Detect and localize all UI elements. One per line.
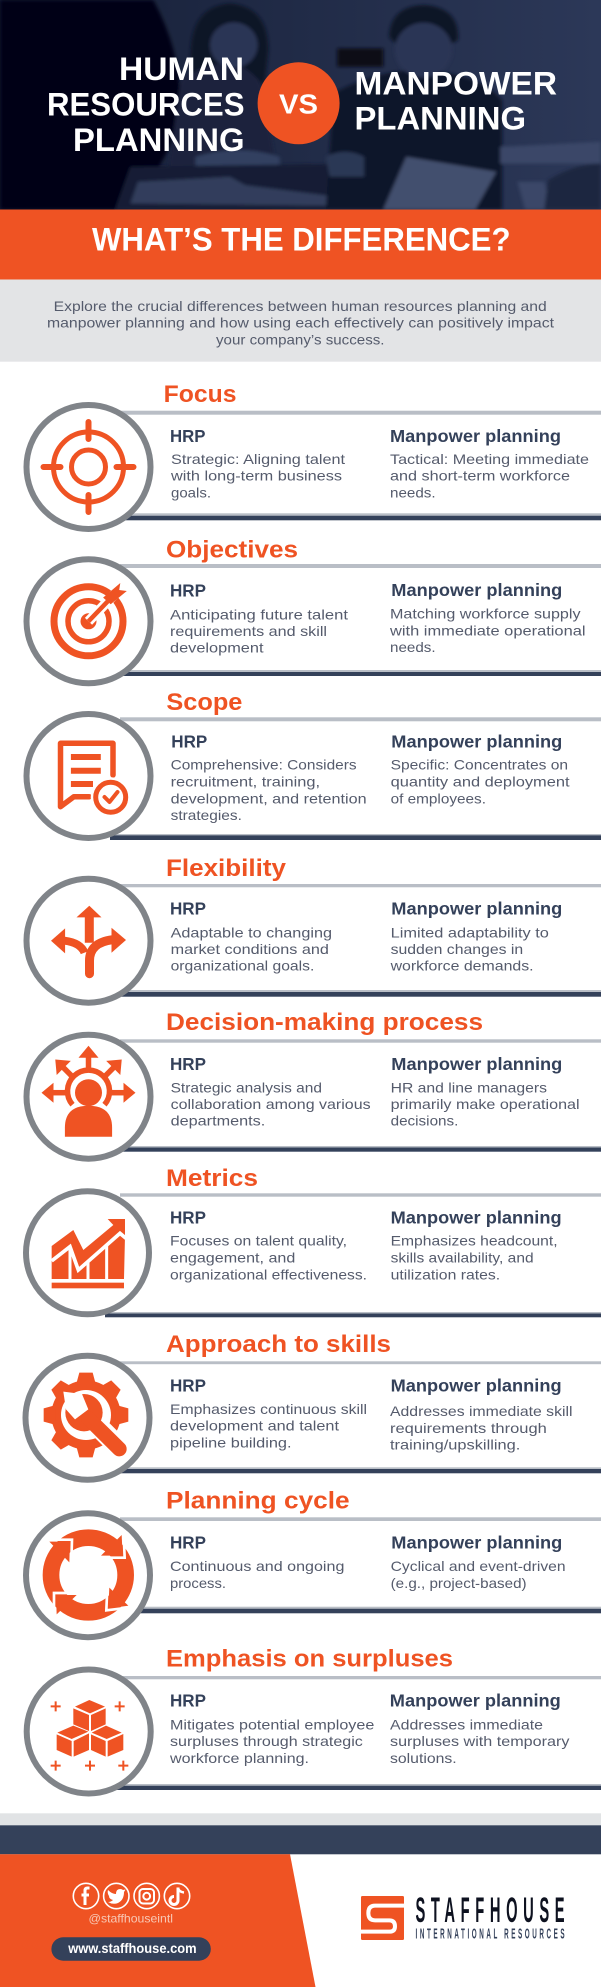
Manpower planning column: Manpower planning [390,1691,561,1711]
HRP column: surpluses through strategic [170,1733,363,1749]
HRP column: Continuous and ongoing [170,1558,344,1574]
HRP column: HRP [170,581,206,601]
Manpower planning column: Addresses immediate skill [390,1403,572,1419]
Manpower planning column: HR and line managers [391,1079,547,1095]
Manpower planning column: Cyclical and event-driven [391,1558,566,1574]
hero background photo [0,0,601,210]
heading: Scope [166,689,242,716]
Manpower planning column [390,1691,569,1766]
icon: target with arrow [26,559,150,683]
HRP column: Focuses on talent quality, [170,1233,347,1249]
Manpower planning column [391,732,570,806]
Manpower planning column: needs. [390,639,436,655]
panel: Approach to skills [26,1331,601,1480]
footer [0,1813,601,1987]
Manpower planning column: primarily make operational [391,1096,580,1112]
panel: Scope [26,689,601,840]
HRP column [170,898,332,974]
HRP column [170,1376,367,1451]
HRP column: workforce planning. [169,1750,309,1766]
Manpower planning column: Manpower planning [391,1054,562,1074]
Manpower planning column: and short-term workforce [390,468,570,484]
Manpower planning column: surpluses with temporary [390,1733,569,1749]
Manpower planning column [391,1532,566,1591]
right title: Manpower Planning: PLANNING [354,100,526,136]
icon: document with check badge [26,714,150,838]
icon: circular arrows [26,1513,150,1637]
website pill [51,1937,211,1961]
HRP column: development [170,640,264,656]
right title: Manpower Planning [354,65,557,136]
HRP column: requirements and skill [170,623,327,639]
intro text panel: Explore the crucial differences between human resources planning and [54,298,547,314]
Manpower planning column: with immediate operational [389,622,586,638]
Manpower planning column: workforce demands. [389,958,534,974]
Manpower planning column: quantity and deployment [391,773,570,789]
heading: Emphasis on surpluses [166,1646,453,1673]
Manpower planning column: decisions. [391,1113,458,1129]
heading: Flexibility [166,855,287,882]
panel: Focus [26,381,601,529]
HRP column: HRP [170,898,206,918]
HRP column: HRP [171,732,208,752]
icon: twitter [104,1883,129,1909]
Manpower planning column [389,898,562,974]
logo wordmark: STAFFHOUSE [416,1891,565,1930]
Manpower planning column [390,426,589,501]
panel: Emphasis on surpluses [27,1646,601,1794]
HRP column: HRP [170,1376,206,1396]
left title: Human Resources Planning [47,51,244,158]
Manpower planning column: Emphasizes headcount, [391,1233,558,1249]
icon: branching arrows [26,879,150,1003]
HRP column: organizational goals. [171,958,314,974]
left title: Human Resources Planning: HUMAN [119,51,244,87]
HRP column: HRP [170,1054,206,1074]
heading: Objectives [166,536,298,563]
heading: Metrics [166,1165,258,1192]
Manpower planning column: Matching workforce supply [390,606,580,622]
HRP column [170,1054,371,1129]
Manpower planning column: solutions. [390,1750,457,1766]
Manpower planning column: Manpower planning [391,732,562,752]
heading: Planning cycle [166,1488,350,1515]
Manpower planning column: Addresses immediate [390,1716,543,1732]
Manpower planning column [390,1376,572,1453]
Manpower planning column: utilization rates. [391,1266,500,1282]
HRP column [169,1691,375,1766]
HRP column: Anticipating future talent [170,606,348,622]
Manpower planning column: skills availability, and [391,1249,534,1265]
HRP column: with long-term business [170,468,342,484]
panel: Planning cycle [26,1488,601,1637]
icon: rising chart [26,1191,149,1314]
HRP column [170,1207,367,1282]
Manpower planning column: training/upskilling. [390,1437,520,1453]
Manpower planning column: of employees. [391,790,486,806]
heading: Decision-making process [166,1009,483,1036]
panel: Objectives [26,536,601,683]
icon: gear and wrench [26,1356,150,1480]
Manpower planning column [389,580,586,655]
icon: facebook [73,1883,99,1909]
Manpower planning column: Manpower planning [391,1376,562,1396]
logo: Staffhouse [361,1891,565,1942]
HRP column: Strategic: Aligning talent [171,451,345,467]
HRP column: recruitment, training, [171,773,320,789]
panel: Flexibility [26,855,601,1003]
icon: crosshair [26,405,150,529]
Manpower planning column: Specific: Concentrates on [391,757,568,773]
Manpower planning column: Manpower planning [391,898,562,918]
icon: tiktok [164,1883,190,1909]
subtitle band: WHAT’S THE DIFFERENCE? [92,222,510,258]
heading: Focus [164,381,236,408]
website pill: www.staffhouse.com [67,1941,197,1956]
HRP column: HRP [170,1532,206,1552]
HRP column: departments. [171,1113,265,1129]
Manpower planning column: Manpower planning [391,1532,562,1552]
intro text panel [0,280,601,362]
HRP column: Mitigates potential employee [170,1716,375,1732]
Manpower planning column: Manpower planning [390,426,561,446]
VS badge: VS [279,88,318,119]
Manpower planning column [391,1054,580,1129]
HRP column: Adaptable to changing [171,924,332,940]
Manpower planning column: sudden changes in [391,941,523,957]
HRP column [170,1532,344,1591]
hero banner [0,0,601,210]
Manpower planning column: Limited adaptability to [391,924,549,940]
logo mark [361,1896,404,1940]
left title: Human Resources Planning: RESOURCES [47,87,244,123]
HRP column: development and talent [170,1418,339,1434]
HRP column [170,426,345,501]
HRP column [170,581,348,656]
HRP column: organizational effectiveness. [170,1266,367,1282]
Manpower planning column: (e.g., project-based) [391,1575,527,1591]
logo wordmark: INTERNATIONAL RESOURCES [416,1927,565,1942]
panel: Metrics [26,1165,601,1317]
HRP column: market conditions and [171,941,329,957]
panel: Decision-making process [26,1009,601,1159]
left title: Human Resources Planning: PLANNING [73,122,244,158]
VS badge [258,62,340,144]
HRP column: HRP [170,426,206,446]
HRP column: Comprehensive: Considers [171,757,357,773]
HRP column [171,732,367,823]
intro text panel: your company’s success. [216,331,384,347]
HRP column: development, and retention [171,790,367,806]
Manpower planning column: requirements through [390,1420,547,1436]
HRP column: collaboration among various [171,1096,371,1112]
HRP column: HRP [170,1691,206,1711]
Manpower planning column: Manpower planning [391,580,562,600]
icon: person with radiating arrows [26,1035,150,1159]
HRP column: goals. [171,485,211,501]
icon: stacked cubes [27,1670,151,1794]
Manpower planning column: Tactical: Meeting immediate [390,451,589,467]
social handle: @staffhouseintl [88,1912,173,1926]
HRP column: Strategic analysis and [171,1079,322,1095]
intro text panel: manpower planning and how using each effectively can positively impact [47,315,554,331]
subtitle band [0,210,601,280]
HRP column: pipeline building. [170,1435,292,1451]
HRP column: Emphasizes continuous skill [170,1401,367,1417]
icon: instagram [134,1883,159,1909]
right title: Manpower Planning: MANPOWER [354,65,557,101]
HRP column: engagement, and [170,1249,295,1265]
Manpower planning column [391,1207,562,1282]
HRP column: strategies. [171,807,242,823]
HRP column: process. [170,1575,226,1591]
heading: Approach to skills [166,1331,391,1358]
Manpower planning column: Manpower planning [391,1207,562,1227]
HRP column: HRP [170,1207,206,1227]
Manpower planning column: needs. [390,485,436,501]
